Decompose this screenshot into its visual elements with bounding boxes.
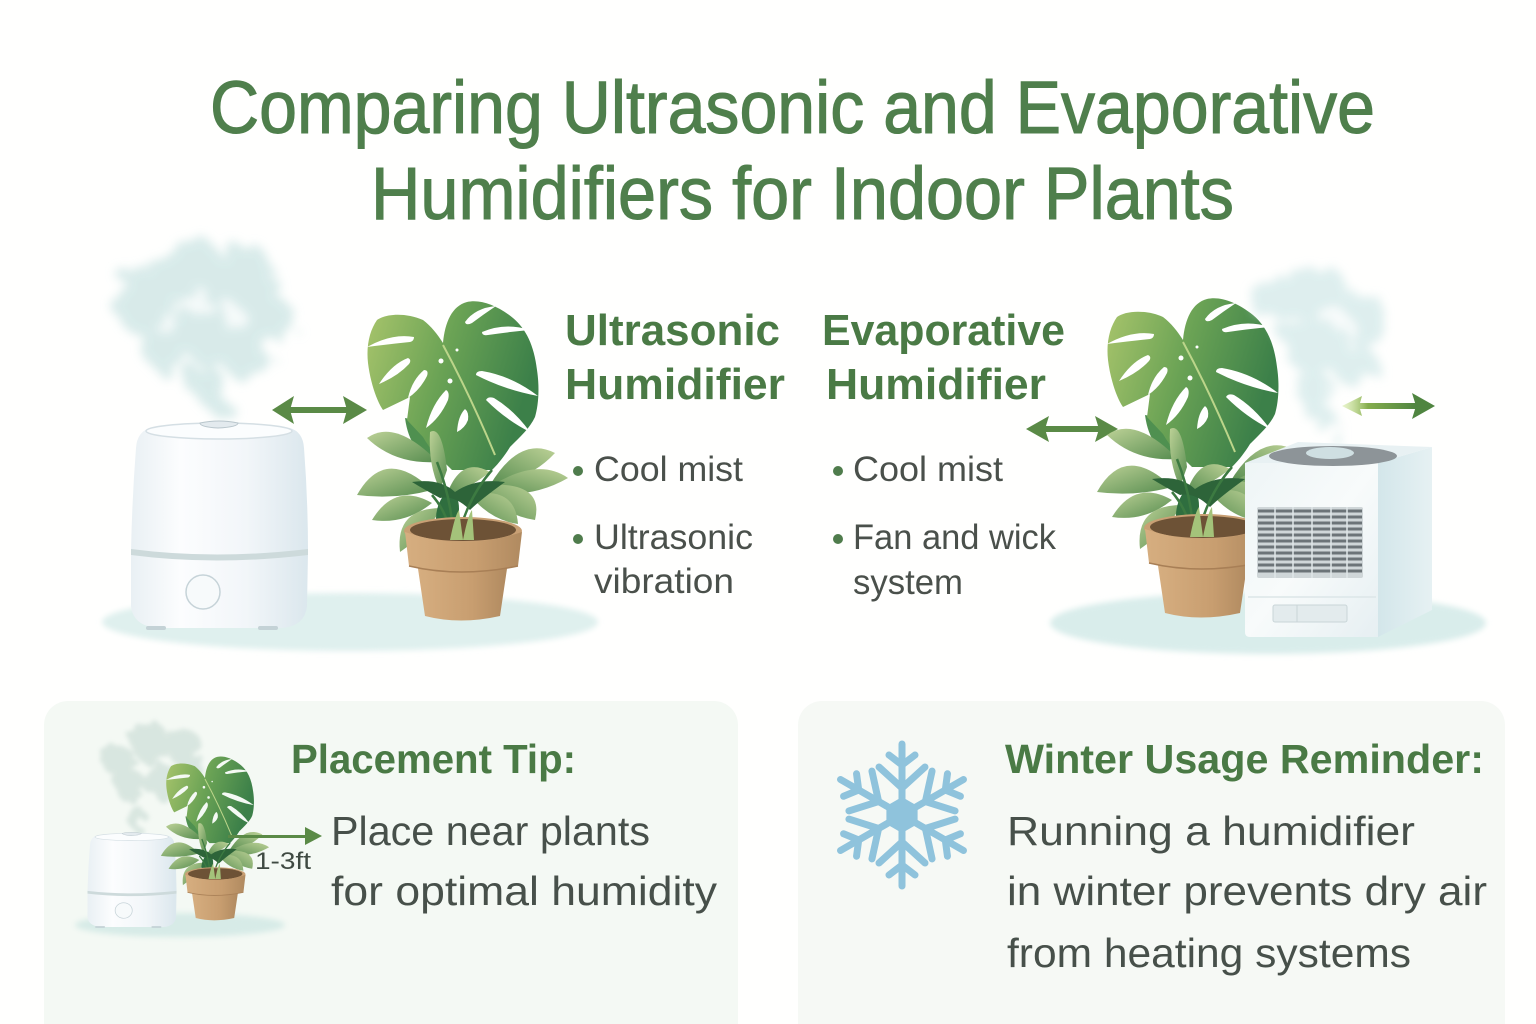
body text: Running a humidifier bbox=[1007, 808, 1415, 854]
list: evaporative features bbox=[833, 450, 1056, 602]
floor shadow bbox=[102, 593, 598, 651]
body text: from heating systems bbox=[1007, 930, 1411, 976]
heading: evaporative bbox=[822, 306, 1065, 409]
plant bbox=[1097, 298, 1308, 618]
body text bbox=[1007, 808, 1487, 976]
panel: winter usage reminder bbox=[798, 701, 1505, 1024]
panel: placement tip bbox=[44, 701, 738, 1024]
list: ultrasonic features bbox=[573, 450, 753, 601]
plant bbox=[357, 301, 568, 620]
list: evaporative features: Cool mist bbox=[853, 450, 1003, 489]
heading: ultrasonic bbox=[565, 306, 785, 409]
evaporative unit bbox=[1245, 442, 1432, 637]
heading: evaporative: Evaporative bbox=[822, 306, 1065, 355]
icon: snowflake bbox=[829, 744, 975, 886]
body text: Place near plants bbox=[331, 808, 650, 854]
title: Humidifiers for Indoor Plants bbox=[371, 152, 1234, 235]
heading: evaporative: Humidifier bbox=[826, 360, 1046, 409]
illustration: ultrasonic humidifier and plant bbox=[102, 236, 598, 651]
heading: Winter Usage Reminder: bbox=[1005, 736, 1484, 782]
humidifier bbox=[131, 421, 308, 630]
illustration: small humidifier and plant bbox=[75, 722, 285, 937]
outgoing arrow bbox=[1342, 396, 1416, 416]
body text: for optimal humidity bbox=[331, 868, 718, 914]
floor shadow bbox=[1050, 592, 1486, 654]
list: ultrasonic features: Ultrasonic bbox=[594, 518, 753, 557]
illustration: evaporative humidifier and plant bbox=[1026, 265, 1486, 654]
distance label: 1-3ft bbox=[255, 848, 311, 875]
double arrow bbox=[1026, 416, 1118, 442]
body text: in winter prevents dry air bbox=[1007, 868, 1487, 914]
title bbox=[210, 66, 1375, 235]
heading: Placement Tip: bbox=[291, 736, 576, 782]
list: evaporative features: system bbox=[853, 563, 963, 602]
list: ultrasonic features: Cool mist bbox=[594, 450, 743, 489]
heading: ultrasonic: Ultrasonic bbox=[565, 306, 780, 355]
list: evaporative features: Fan and wick bbox=[853, 518, 1056, 557]
title: Comparing Ultrasonic and Evaporative bbox=[210, 66, 1375, 149]
heading: ultrasonic: Humidifier bbox=[565, 360, 785, 409]
distance arrow bbox=[228, 827, 322, 845]
mist cloud bbox=[115, 236, 294, 415]
double arrow bbox=[272, 396, 367, 424]
mist cloud bbox=[1251, 265, 1391, 437]
body text bbox=[331, 808, 718, 914]
list: ultrasonic features: vibration bbox=[594, 562, 734, 601]
